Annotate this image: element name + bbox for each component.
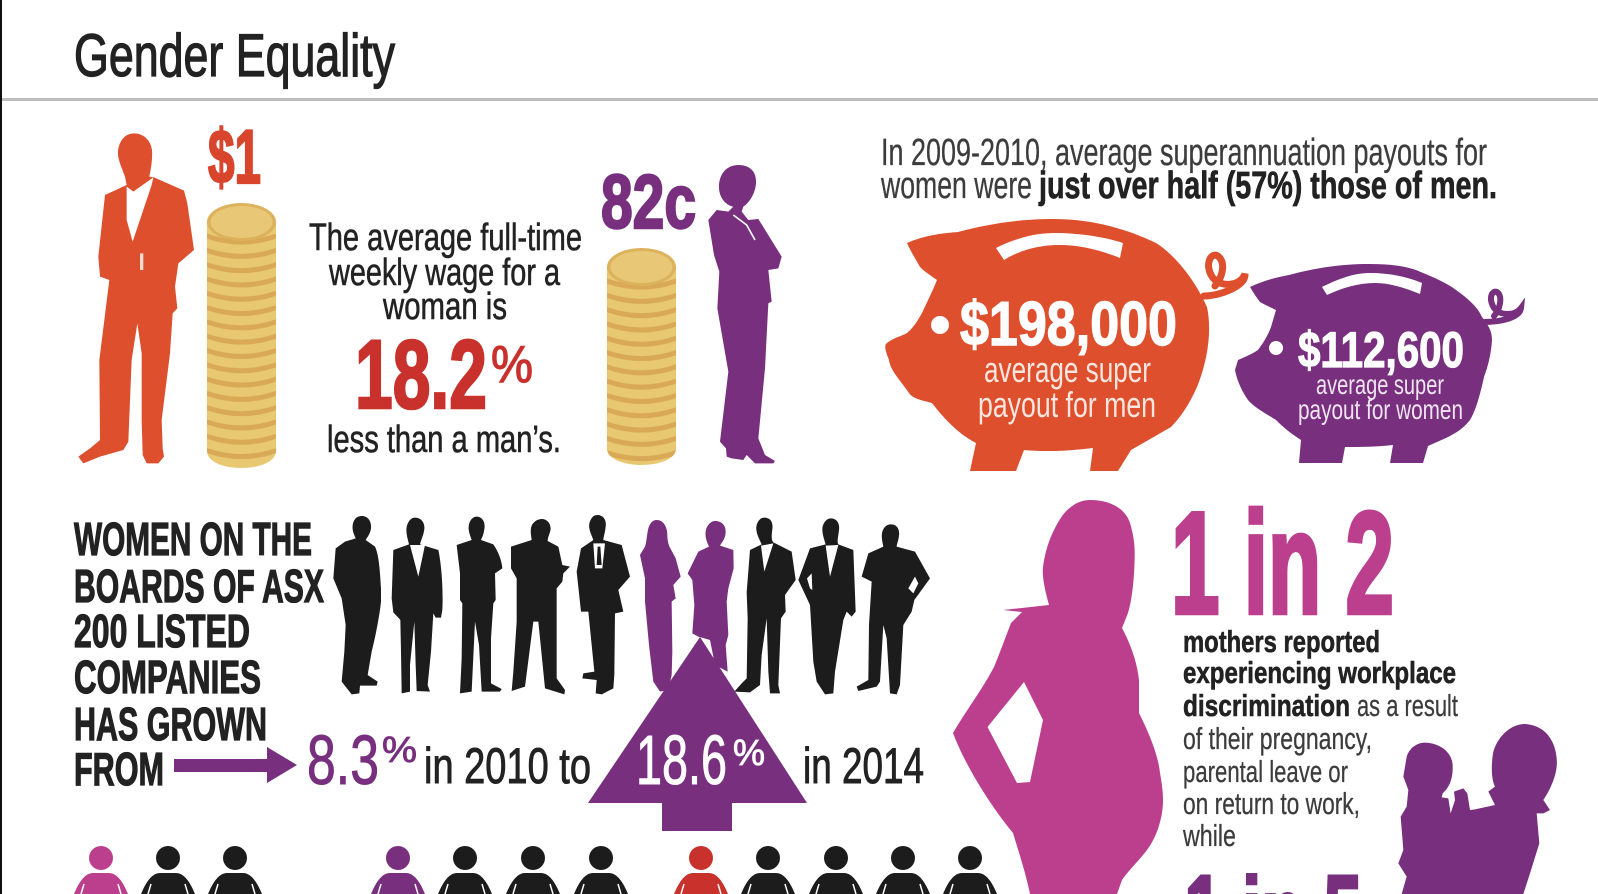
pregnant woman silhouette <box>953 500 1163 894</box>
statistic: 18.2%: % <box>491 336 533 394</box>
statistic: 1 in 2: 1 in 2 <box>1171 482 1394 644</box>
wage text: woman is <box>382 286 507 328</box>
super intro text: women were <box>880 165 1032 207</box>
boards heading: BOARDS OF ASX <box>74 560 324 612</box>
piggy bank: men: payout for men <box>978 384 1156 425</box>
discrimination text: while <box>1182 818 1236 853</box>
wage text <box>309 217 582 328</box>
group: 1 in 3 <box>74 846 262 894</box>
board members: women <box>640 520 734 692</box>
pictogram row <box>74 846 997 894</box>
piggy bank: men <box>885 219 1245 471</box>
piggy bank: women: $112,600 <box>1298 322 1464 378</box>
boards heading: WOMEN ON THE <box>74 513 312 565</box>
text: in 2010 to: in 2010 to <box>424 738 591 794</box>
panel: pregnancy discrimination <box>953 482 1557 894</box>
piggy bank: women <box>1235 264 1521 463</box>
wage text: weekly wage for a <box>328 252 561 294</box>
discrimination text: experiencing workplace <box>1183 655 1456 690</box>
man silhouette <box>78 133 194 463</box>
boards heading: COMPANIES <box>74 651 261 703</box>
piggy bank: men: $198,000 <box>960 290 1177 359</box>
woman silhouette <box>708 165 782 463</box>
discrimination text: discrimination <box>1183 688 1350 723</box>
discrimination text: as a result <box>1357 688 1458 723</box>
arrow: right <box>174 747 297 783</box>
left page edge <box>0 0 2 894</box>
arrow: up with 18.6%: 18.6 <box>636 721 727 799</box>
piggy bank: women: average super <box>1316 369 1444 400</box>
title: Gender Equality <box>74 22 395 89</box>
boards heading: FROM <box>74 743 164 795</box>
piggy bank: men: average super <box>984 349 1151 390</box>
discrimination text: mothers reported <box>1183 624 1380 659</box>
text: in 2014: in 2014 <box>803 738 924 794</box>
coin stack: 82c <box>607 248 676 465</box>
coin stack: $1 <box>207 203 276 468</box>
panel: wage gap <box>78 115 782 468</box>
panel: superannuation <box>880 132 1521 471</box>
discrimination text: on return to work, <box>1183 786 1360 821</box>
boards heading: 200 LISTED <box>74 605 250 657</box>
statistic: 8.3%: % <box>382 729 417 770</box>
discrimination text: of their pregnancy, <box>1183 721 1372 756</box>
super intro text <box>880 132 1497 207</box>
panel: women on boards <box>74 513 930 831</box>
group: 1 in 4 <box>371 846 628 894</box>
board members: men right <box>734 518 930 694</box>
mother and child silhouette <box>1398 724 1557 894</box>
boards heading <box>74 513 324 795</box>
discrimination text: parental leave or <box>1183 754 1348 789</box>
boards heading: HAS GROWN <box>74 698 267 750</box>
label: 82c: 82c <box>601 160 696 245</box>
row of board members: men left <box>333 515 630 694</box>
statistic: 8.3%: 8.3 <box>307 721 379 799</box>
wage text end: less than a man’s. <box>327 419 561 461</box>
arrow: up with 18.6% <box>588 637 807 831</box>
arrow: up with 18.6%: % <box>733 732 765 773</box>
group: 1 in 5 <box>674 846 997 894</box>
header rule <box>2 98 1598 101</box>
statistic: 18.2%: 18.2 <box>355 320 487 429</box>
discrimination text <box>1182 624 1458 853</box>
label: $1: $1 <box>208 115 261 200</box>
wage text: The average full-time <box>309 217 582 259</box>
piggy bank: women: payout for women <box>1298 394 1463 425</box>
